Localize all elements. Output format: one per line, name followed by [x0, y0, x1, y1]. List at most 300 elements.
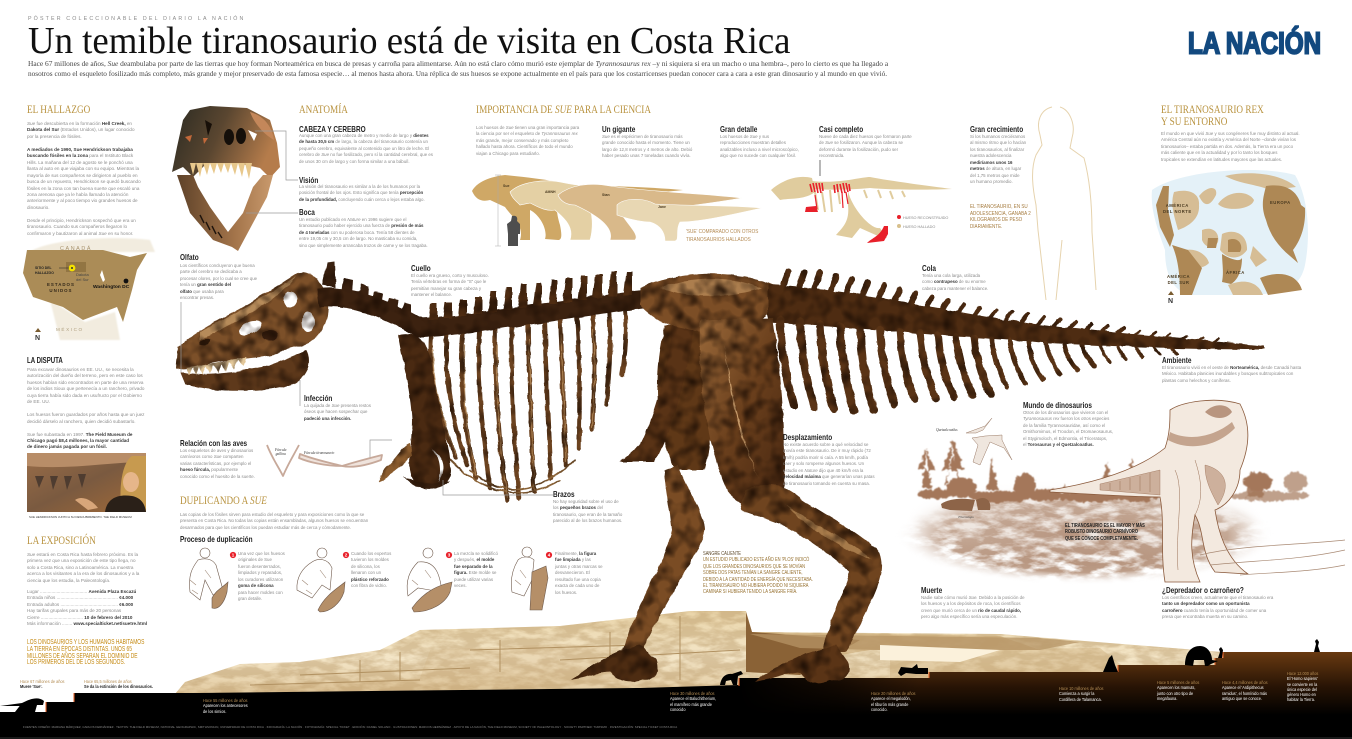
label: quetzalcoatlus: Quetzalcoatlus — [936, 428, 958, 432]
subheading: Visión — [299, 175, 318, 185]
subheading: Proceso de duplicación — [180, 534, 253, 544]
text: del 1,75 metros que mide — [970, 173, 1020, 178]
text: Sue fue descubierta en la formación Hell Creek, en — [27, 121, 132, 126]
text: Nueve de cada diez huesos que formaron parte — [819, 134, 912, 139]
photo caption: SUE HENDRICKSON JUNTO A SU DESCUBRIMIENTO. THE FIELD MUSEUM — [29, 515, 132, 519]
callout: largest carnivore: QUE SE CONOCE COMPLETAMENTE. — [1065, 536, 1138, 542]
text: Los científicos concluyeron que buena — [180, 263, 255, 268]
timeline label: 30 million: conocido — [670, 707, 685, 712]
step 2: Cuando los expertos — [351, 551, 391, 556]
text: No hay seguridad sobre el uso de — [553, 499, 619, 504]
subheading: Infección — [304, 393, 332, 403]
text: el Torosaurus y el Quetzalcoatlus. — [1023, 442, 1094, 447]
step 2: de silicona, los — [351, 564, 380, 569]
diagram: bird wishbone — [267, 445, 382, 476]
text: de dinero jamás pagada por un fósil. — [27, 444, 107, 449]
timeline label: 12,000 years: Hace 12.000 años — [1287, 671, 1318, 676]
text — [27, 121, 141, 236]
text: carroñero cuando tenía la oportunidad de comer una — [1162, 608, 1266, 613]
step texts: duplication — [238, 551, 603, 606]
label: África: ÁFRICA — [1226, 270, 1245, 275]
timeline label: 55 million: de los simios. — [203, 709, 226, 714]
chart: size comparison of tyrannosaurs: Stan — [602, 193, 610, 197]
text: mayoría de sus compañeros se dirigieron al pueblo en — [27, 173, 138, 178]
text: El mundo en que vivió Sue y sus congéneres fue muy distinto al actual. — [1161, 131, 1300, 136]
text: conocido como el huesito de la suerte. — [180, 474, 255, 479]
step 3: fue separado de la — [454, 564, 493, 569]
label: sitio del hallazgo: SITIO DEL — [35, 266, 52, 270]
timeline label: 10 million — [1059, 686, 1103, 702]
label: Dakota del Sur: Dakota — [76, 272, 89, 277]
text: Sue estará en Costa Rica hasta febrero próximo. Es la — [27, 552, 138, 557]
text: plantas como helechos y coníferas. — [1162, 378, 1231, 383]
illustration: quetzalcoatlus — [966, 418, 1012, 465]
callout: DIARIAMENTE. — [970, 224, 1002, 230]
text: llanta al auto en que viajaba con su equipo. Mientras la — [27, 166, 139, 171]
text — [1023, 410, 1113, 449]
text: tiranosaurio. Cuando sus compañeros llegaron lo — [27, 224, 127, 229]
text: Tenía una cola larga, utilizada — [922, 273, 980, 278]
label: Washington DC: Washington DC — [93, 285, 129, 290]
timeline label: 67 million: Hace 67 millones de años — [20, 679, 64, 684]
step 1: limpiados y reparados, — [238, 570, 282, 575]
text: Otros de los dinosaurios que vivieron con el — [1023, 410, 1108, 415]
legend: bones: HUESO RECONSTRUIDO — [903, 216, 948, 220]
text: reconstruida. — [819, 153, 844, 158]
text — [1162, 595, 1273, 621]
panel: gran crecimiento — [970, 124, 1031, 230]
text: algo que no sucede con cualquier fósil. — [720, 153, 796, 158]
callout: sangre caliente: SOBRE DOS PATAS TENÍAN LA SANGRE CALIENTE, — [703, 570, 803, 576]
step 3: y después, el molde — [454, 557, 494, 562]
chart: size comparison of tyrannosaurs: Sue — [503, 184, 509, 188]
timeline label: 55 million: Hace 55 millones de años — [203, 698, 247, 703]
text: km/h) podría morir si caía. A 55 km/h, podía — [783, 455, 868, 460]
callout: LOS DINOSAURIOS Y LOS HUMANOS HABITAMOS — [27, 639, 144, 646]
text: parte del cerebro se dedicaba a — [180, 269, 242, 274]
subheading: Boca — [299, 207, 315, 217]
step 2: con fibra de vidrio. — [351, 583, 387, 588]
text: Tyrannosaurus rex fueron los otros especies — [1023, 416, 1109, 421]
text: más caliente que en la actualidad y por lo tanto los bosques — [1161, 150, 1277, 155]
text — [180, 263, 257, 300]
text: los huesos y a los depósitos de roca, los científicos — [921, 601, 1021, 606]
text: anteriormente y al poco tiempo vio grandes huesos de — [27, 198, 138, 203]
timeline label: 65.5 million — [84, 679, 153, 690]
text: Los esqueletos de aves y dinosaurios — [180, 448, 253, 453]
heading: DUPLICANDO A SUE — [180, 495, 267, 507]
skeleton: shoulder and arm — [378, 334, 451, 489]
panel: importancia de Sue — [476, 104, 912, 158]
text: por la presencia de fósiles. — [27, 134, 82, 139]
step 1: para hacer moldes con — [238, 590, 283, 595]
panel: ambiente — [1162, 356, 1312, 386]
text: largo de 12,8 metros y 4 metros de alto. Debió — [602, 147, 692, 152]
step 3: La mezcla se solidificó — [454, 551, 498, 556]
text: Aunque con una gran cabeza de metro y medio de largo y dientes — [299, 133, 429, 138]
text — [27, 552, 140, 583]
panel: el tiranosaurio rex y su entorno — [1161, 104, 1300, 162]
timeline label: 5 million: megafauna. — [1157, 696, 1177, 701]
step 2: tuvieron los moldes — [351, 557, 389, 562]
panel: cola — [922, 264, 992, 298]
subheading: Cuello — [411, 263, 431, 273]
timeline label: 12,000 years — [1287, 671, 1318, 703]
subheading: Un gigante — [602, 124, 635, 134]
text: mantener el balance. — [411, 292, 452, 297]
timeline label: 65.5 million: Hace 65,5 millones de años — [84, 679, 132, 684]
timeline label: 20 million: Hace 20 millones de años — [871, 691, 915, 696]
text — [411, 273, 489, 297]
label: América del Norte: DEL NORTE — [1163, 209, 1192, 214]
intro — [28, 59, 888, 78]
label: Estados Unidos — [47, 282, 75, 293]
text: metros de altura, en lugar — [970, 166, 1021, 171]
text: de unos 30 cm de largo y con forma similar a una bábuíl. — [299, 159, 410, 164]
label: Dakota del Sur: del Sur — [76, 277, 89, 282]
text: encontrar presas. — [180, 295, 214, 300]
callout: largest carnivore — [1065, 523, 1145, 542]
text — [921, 595, 1025, 621]
panel: la exposición — [27, 534, 147, 666]
subheading: Ambiente — [1162, 355, 1191, 365]
illustration: rock base — [170, 611, 1352, 705]
legend: bones: HUESO HALLADO — [903, 225, 935, 229]
text: primera vez que una exposición de este tipo llega, no — [27, 558, 136, 563]
text: tenía un gran sentido del — [180, 282, 231, 287]
step 1: los curadores utilizaron — [238, 577, 283, 582]
skeleton: T. rex Sue — [176, 262, 1264, 683]
text: grande conocido hasta el momento. Tiene un — [602, 140, 690, 145]
text: Los científicos creen, actualmente que el tiranosaurio era — [1162, 595, 1273, 600]
text: Desde el principio, Hendrickson sospechó que era un — [27, 218, 136, 223]
step 3 — [454, 551, 498, 590]
step 4: desvanecieron. El — [555, 570, 590, 575]
text: los tiranosaurios, al finalizar — [970, 147, 1024, 152]
text: acerca a los visitantes a la era de los dinosaurios y a la — [27, 571, 139, 576]
chart: size comparison of tyrannosaurs: AMNH — [545, 190, 556, 194]
icon: north arrow: N — [1168, 298, 1173, 305]
callout: LA TIERRA EN ÉPOCAS DISTINTAS. UNOS 65 — [27, 646, 132, 653]
panel: muerte — [921, 586, 1036, 622]
timeline label: 65.5 million: Se da la extinción de los dinosaurios. — [84, 684, 153, 689]
text: un humano promedio. — [970, 179, 1013, 184]
text — [553, 499, 622, 525]
text: olfato que usaba para — [180, 289, 224, 294]
text: entre 19,05 cm y 30,5 cm de largo. No masticaba su comida, — [299, 236, 417, 241]
text: reproducciones muestran detalles — [720, 140, 786, 145]
intro: nosotros como el esqueleto fosilizado más completo, más grande y mejor preservado de esta famosa especie… al menos hasta ahora. Una réplica de sus huesos se expone actualmente en el país para que los costarricenses puedan conocer cara a cara a este gran dinosaurio y al mundo en que vivió. — [28, 70, 887, 78]
callout: sangre caliente: DEBIDO A LA CANTIDAD DE ENERGÍA QUE NECESITABA. — [703, 577, 813, 583]
timeline: black stepped strata — [0, 652, 1352, 739]
callout: largest carnivore: EL TIRANOSAURIO ES EL MAYOR Y MÁS — [1065, 523, 1145, 529]
text: Las copias de los fósiles sirven para estudio del esqueleto y para exposiciones como la que se — [180, 512, 364, 517]
timeline label: 20 million: el tiburón más grande — [871, 702, 908, 707]
text — [720, 134, 799, 158]
chart: size comparison of tyrannosaurs: Jane — [658, 205, 666, 209]
timeline label: 20 million — [871, 691, 915, 712]
text — [1161, 131, 1300, 162]
text: El cuello era grueso, corto y musculoso. — [411, 273, 489, 278]
timeline label: 4.4 million — [1222, 680, 1268, 701]
step 2: plástico reforzado — [351, 577, 389, 582]
text — [299, 184, 425, 202]
text: ciencia que los estudia, la Paleontología. — [27, 578, 110, 583]
callout — [27, 639, 144, 666]
text: Chicago pagó $8,4 millones, la mayor cantidad — [27, 438, 129, 443]
title: Un temible tiranosaurio está de visita en Costa Rica — [28, 20, 791, 62]
panel: brazos — [553, 490, 628, 526]
text: cuya tierra había sido dada en usufructo por el Gobierno — [27, 393, 142, 398]
label: América del Norte — [1163, 202, 1192, 214]
step 4: juntas y otras marcas se — [555, 564, 603, 569]
text: viajan a Chicago para estudiarlo. — [476, 151, 540, 156]
text: presa que encontraba muerta en su camino. — [1162, 614, 1248, 619]
connector lines — [181, 131, 820, 495]
subheading: Olfato — [180, 252, 199, 262]
text: deformó durante la fosilización, pudo ser — [819, 147, 898, 152]
text: solo a Costa Rica, sino a Latinoamérica. La muestra — [27, 565, 133, 570]
icons: red step numbers: 2 — [345, 553, 348, 558]
text: velocidad máxima que generarían unas patas — [783, 474, 875, 479]
step 3: figura. Este molde se — [454, 570, 496, 575]
callout: KILOGRAMOS DE PESO — [970, 217, 1022, 223]
step 4: fue limpiada y las — [555, 557, 591, 562]
timeline label: 5 million — [1157, 680, 1199, 701]
text: más grande, mejor conservado y más completo — [476, 138, 568, 143]
photo: front view of skull — [172, 106, 280, 251]
text: óseos que hacen sospechar que — [304, 409, 367, 414]
text — [27, 367, 144, 449]
step 1 — [238, 551, 285, 603]
callout: sangre caliente: UN ESTUDIO PUBLICADO ESTE AÑO EN 'PLOS' INDICÓ — [703, 557, 809, 563]
text: procesar olores, por lo cual se cree que — [180, 276, 257, 281]
step 1: fueron desenterrados, — [238, 564, 281, 569]
text: de los indios Sioux que pertenecía a un ranchero, privado — [27, 386, 144, 391]
label: América del Sur — [1167, 274, 1190, 285]
callout: sangre caliente — [703, 551, 813, 596]
text: Ornithomimus, el Troodon, el Dromaeosaurus, — [1023, 429, 1113, 434]
text: El tiranosaurio vivió en el oeste de Norteamérica, desde Canadá hasta — [1162, 365, 1301, 370]
timeline label: 30 million — [670, 691, 716, 712]
skeleton: hips — [620, 274, 785, 462]
label: América del Norte: AMÉRICA — [1166, 203, 1189, 208]
subheading: Gran crecimiento — [970, 124, 1023, 134]
text: tiranosaurio, que eran de la tamaño — [553, 512, 622, 517]
panel: anatomía — [299, 103, 433, 248]
text — [970, 134, 1026, 184]
timeline label: 4.4 million: ramidus', el homínido más — [1222, 691, 1267, 696]
map labels: United States — [35, 245, 130, 332]
icons: red step numbers: 1 — [232, 553, 235, 558]
timeline label: 5 million: junto con otro tipo de — [1157, 691, 1193, 696]
text: varias características, por ejemplo el — [180, 461, 251, 466]
text: el Stygimoloch, el Edmontia, el Triceratops, — [1023, 436, 1107, 441]
text: zona arenosa que ya le había llamado la atención — [27, 192, 128, 197]
kicker: PÓSTER COLECCIONABLE DEL DIARIO LA NACIÓN — [28, 16, 245, 22]
text: padeció una infección. — [304, 416, 351, 421]
text: Sue es el espécimen de tiranosaurio más — [602, 134, 683, 139]
text: hallado hasta ahora. Científicos de todo el mundo — [476, 144, 573, 149]
label: América del Sur: DEL SUR — [1168, 280, 1189, 285]
step 1: originales de Sue — [238, 557, 272, 562]
text — [602, 134, 692, 158]
skeleton: tail — [768, 272, 1264, 411]
heading: EL TIRANOSAURIO REX — [1161, 104, 1264, 116]
callout: sangre caliente: CAMINAR SI HUBIERA TENIDO LA SANGRE FRÍA. — [703, 589, 797, 595]
map: United States — [23, 238, 155, 342]
timeline label: 4.4 million: Aparece el 'Ardipithecus — [1222, 685, 1264, 690]
timeline label: 12,000 years: se convierte en la — [1287, 682, 1317, 687]
photo: Sue Hendrickson with fossil — [27, 453, 146, 512]
skeleton: front leg — [700, 318, 882, 683]
text: analizables incluso a nivel microscópico, — [720, 147, 799, 152]
text: buscando fósiles en la zona para el Instituto Black — [27, 153, 133, 158]
icons: red step numbers: 3 — [448, 553, 451, 558]
text: caer y solo romperse algunos huesos. Un — [783, 461, 864, 466]
text: La quijada de Sue presenta restos — [304, 403, 371, 408]
text: Los huesos fueron guardados por años hasta que un juez — [27, 412, 144, 417]
timeline label: 10 million: Cordillera de Talamanca. — [1059, 697, 1102, 702]
icons: red step numbers: 4 — [548, 553, 551, 558]
timeline label: 10 million: Comienza a surgir la — [1059, 691, 1094, 696]
step 4: Finalmente, la figura — [555, 551, 596, 556]
text: tiranosaurios– estaba partida en dos. Además, la Tierra era un poco — [1161, 144, 1293, 149]
label: América del Sur: AMÉRICA — [1167, 274, 1190, 279]
text — [1162, 365, 1301, 384]
text: presenta en Costa Rica. No todas las copias están ensambladas, algunos huesos se encuentran — [180, 518, 368, 523]
text: fósiles en la zona con tan buena suerte que escaló una — [27, 186, 139, 191]
diagram: skeleton with reconstructed bones — [771, 177, 952, 243]
text: como contrapeso de su enorme — [922, 279, 986, 284]
step 4: exacta de cada uno de — [555, 583, 599, 588]
intro: Hace 67 millones de años, Sue deambulaba por parte de las tierras que hoy forman Norteamérica en busca de presas y carroña para alimentarse. Aún no está claro cómo murió este ejemplar de Tyrannosaurus rex –y ni siquiera si era un macho o una hembra–, pero lo cierto es que ha llegado a — [28, 59, 888, 68]
text: decidió dárselo al ranchero, quien decidió subastarlo. — [27, 419, 136, 424]
timeline label: 10 million: Hace 10 millones de años — [1059, 686, 1103, 691]
text: de tiranosaurio tomando en cuenta su masa. — [783, 481, 870, 486]
text: los pequeños brazos del — [553, 505, 603, 510]
text: cabeza para mantener el balance. — [922, 286, 988, 291]
panel: depredador o carroñero — [1162, 586, 1287, 622]
text: carnívoros como Sue comparten — [180, 454, 243, 459]
step 3: puede utilizar varias — [454, 577, 493, 582]
text: tiranosaurio pudo haber ejercido una fuerza de presión de más — [299, 223, 423, 228]
text: Hills. La mañana del 12 de agosto se le ponchó una — [27, 160, 133, 165]
timeline label: 67 million — [20, 679, 64, 690]
icon: north arrow: N — [35, 335, 40, 342]
icons: red step numbers — [230, 552, 552, 558]
panel: duplicando a Sue — [180, 495, 395, 545]
text — [180, 448, 255, 480]
subheading: Muerte — [921, 585, 942, 595]
text: Para excavar dinosaurios en EE. UU., se necesita la — [27, 367, 134, 372]
text: Tenía vértebras en forma de "S" que le — [411, 279, 486, 284]
text: mediríamos unos 16 — [970, 160, 1012, 165]
text: Dakota del Sur (Estados Unidos), un lugar conocido — [27, 127, 134, 132]
legend: bones — [903, 216, 948, 229]
text: Los huesos de Sue y sus — [720, 134, 769, 139]
label: furcula tiranosaurio: Fúrcula tiranosaurio — [304, 451, 334, 455]
text: Los huesos de Sue tienen una gran importancia para — [476, 125, 579, 130]
text: movía este tiranosaurio. De ir muy rápido (72 — [783, 448, 871, 453]
timeline label: 12,000 years: habitar la Tierra. — [1287, 697, 1315, 702]
panel: infección — [304, 393, 371, 421]
map labels: prehistoric world — [1163, 200, 1291, 285]
chart: size comparison of tyrannosaurs — [472, 175, 762, 246]
timeline label: 5 million: Aparecen los mamuts, — [1157, 685, 1195, 690]
step 2 — [351, 551, 391, 590]
text: la ciencia por ser el esqueleto de Tyrannosaurus rex — [476, 131, 578, 136]
subheading: Desplazamiento — [783, 432, 832, 442]
text: creen que murió cerca de un río de caudal rápido, — [921, 608, 1021, 613]
label: Europa: EUROPA — [1270, 200, 1291, 205]
text — [304, 403, 371, 421]
callout: sangre caliente: SANGRE CALIENTE — [703, 551, 741, 557]
text: de 4 toneladas con su poderosa boca. Tenía 58 dientes de — [299, 230, 415, 235]
text: desarmados para que los científicos los puedan estudiar más de cerca y cómodamente. — [180, 525, 351, 530]
text: parecido al de los brazos humanos. — [553, 518, 622, 523]
map: prehistoric world — [1152, 170, 1308, 305]
text: Sue fue subastada en 1997. The Field Museum de — [27, 432, 132, 437]
text: América Central aún no existía y América del Norte –donde vivían los — [1161, 137, 1296, 142]
illustration: Cretaceous landscape — [895, 440, 1310, 585]
label: furcula pollo: gallina — [276, 452, 286, 456]
step 4 — [555, 551, 603, 596]
text: tropicales se extendían en latitudes mayores que las actuales. — [1161, 157, 1282, 162]
timeline label: 55 million: Aparecen los antecesores — [203, 703, 248, 708]
skeleton: neck and back spine — [318, 262, 650, 328]
callout: MILLONES DE AÑOS SEPARAN EL DOMINIO DE — [27, 653, 138, 660]
timeline label: 12,000 years: género Homo en — [1287, 692, 1316, 697]
text: dinosaurio. — [27, 205, 49, 210]
callout: EL TIRANOSAURIO, EN SU — [970, 204, 1028, 210]
heading: Y SU ENTORNO — [1161, 116, 1227, 128]
subheading: CABEZA Y CEREBRO — [299, 124, 366, 134]
text: Si los humanos creciéramos — [970, 134, 1025, 139]
callout: largest carnivore: ROBUSTO DINOSAURIO CARNÍVORO — [1065, 529, 1138, 535]
callout: sangre caliente: QUE LOS GRANDES DINOSAURIOS QUE SE MOVÍAN — [703, 564, 805, 570]
illustration: tyrannosaur sketch — [1050, 400, 1345, 582]
timeline label: 30 million: el mamífero más grande — [670, 702, 712, 707]
label: furcula pollo: Fúrcula — [275, 448, 286, 452]
text: de la profundidad, concluyendo cuán cerca o lejos estaba algo. — [299, 197, 425, 202]
timeline label: 55 million — [203, 698, 248, 714]
skeleton: skull — [176, 273, 328, 391]
text — [299, 217, 428, 248]
sketch: four duplication steps — [189, 547, 548, 612]
text — [299, 133, 433, 164]
skeleton: ribs — [430, 300, 626, 500]
info table: Cierre ................................. 10 de febrero del 2010 — [27, 615, 132, 620]
info table: Hay tarifas grupales para más de 20 personas — [27, 608, 121, 613]
timeline label: 5 million: Hace 5 millones de años — [1157, 680, 1199, 685]
diagram: human outline at tyrannosaur growth scale — [1033, 107, 1096, 300]
step 1: gran detalle. — [238, 596, 262, 601]
step 2: llenaron con un — [351, 570, 381, 575]
label: sitio del hallazgo: HALLAZGO — [35, 271, 54, 275]
label: Estados Unidos: UNIDOS — [49, 288, 72, 293]
label: triceratops: Triceratops — [958, 515, 974, 519]
text: posición frontal de los ojos. Esto significa que tenía percepción — [299, 190, 423, 195]
subheading: Brazos — [553, 489, 575, 499]
panel: desplazamiento — [783, 433, 878, 488]
subheading: Relación con las aves — [180, 438, 247, 448]
heading: ANATOMÍA — [299, 104, 348, 116]
text: haber pesado unas 7 toneladas cuando vivía. — [602, 153, 691, 158]
heading — [1161, 104, 1264, 128]
timeline label: 20 million: conocido. — [871, 707, 888, 712]
text: cerebro de Sue no fue fosilizado, pero sí la cantidad cerebral, que es — [299, 152, 433, 157]
